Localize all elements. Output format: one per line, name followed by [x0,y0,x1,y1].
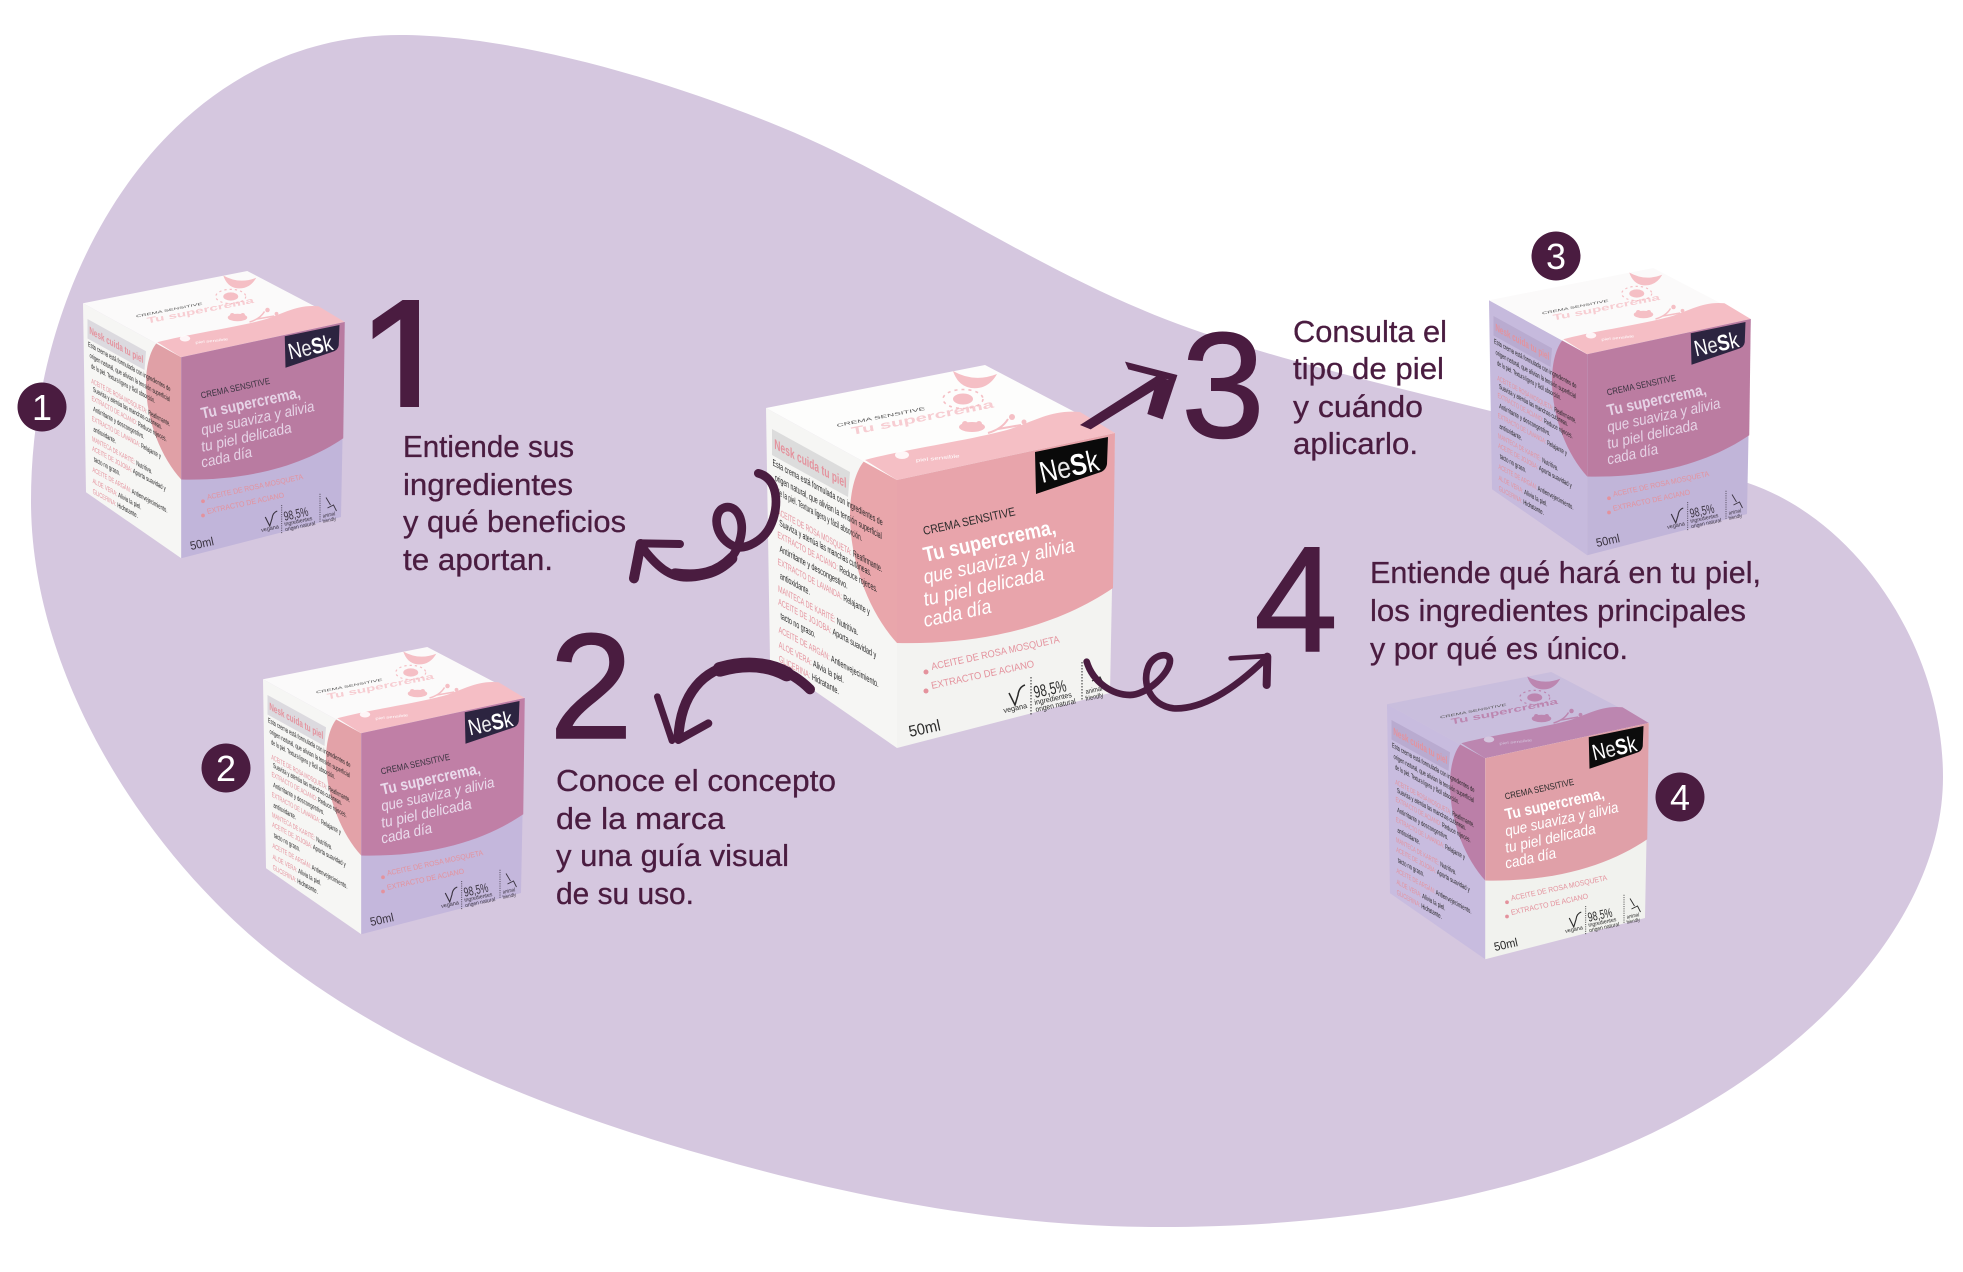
front face: Tu supercrema, [1504,786,1606,824]
left face: Nesk cuida tu piel [1495,322,1549,363]
left face: Esta crema está formulada con ingredientes de [1494,337,1577,390]
text block step 4: los ingredientes principales [1370,593,1746,628]
top face: piel sensible [195,337,229,345]
front face: ACEITE DE ROSA MOSQUETA [206,472,304,502]
central product box [766,365,1115,748]
left face: ALOE VERA: Alivia la piel. [273,852,321,888]
front face: Tu supercrema, [380,761,482,799]
left face [83,303,181,558]
front face: CREMA SENSITIVE [1606,373,1677,397]
top face [766,365,1115,480]
left face: MANTECA DE KARITÉ: Nutritiva. [272,810,332,852]
front face: friendly [1626,917,1641,926]
left face: ACEITE DE ROSA MOSQUETA: Reafirmante. [777,507,882,575]
front face: vegana [1667,521,1686,531]
text block step 2: Conoce el concepto [556,763,836,798]
arrow to step 1 [634,473,776,578]
front face [1485,723,1649,959]
front face: tu piel delicada [1504,821,1597,857]
left face: origen natural, que alivian la tensión superficial [90,351,170,404]
left face: antioxidante. [1499,422,1522,442]
front face: vegana [1003,701,1029,715]
front face: CREMA SENSITIVE [1504,777,1575,801]
left face: origen natural, que alivian la tensión superficial [1394,752,1474,805]
front face: NeSk [1692,327,1742,361]
front face: animal [502,887,516,896]
front face: EXTRACTO DE ACIANO [206,490,285,516]
front face: origen natural [1035,696,1077,714]
front face: 50ml [907,718,942,741]
big numeral 4: 4 [1254,515,1338,683]
left face: ACEITE DE ROSA MOSQUETA: Reafirmante. [91,377,170,428]
left face: Antirritante y descongestivo. [780,544,848,592]
left face: EXTRACTO DE ACIANO: Reduce rojeces. [272,770,347,819]
front face: cada día [921,596,993,632]
text block step 3: Consulta el [1293,314,1447,349]
front face: origen natural [285,521,316,533]
top face: Tu supercrema [146,295,255,325]
front face: 50ml [189,534,215,553]
front face: ingredientes [464,892,493,904]
left face: de la piel. Textura ligera y fácil absorción. [1395,763,1459,806]
left face: MANTECA DE KARITÉ: Nutritiva. [92,434,152,476]
top face: Tu supercrema [850,397,995,437]
left face: Suaviza y atenúa las manchas cutáneas. [779,518,871,579]
front face: 98,5% [1586,905,1614,925]
text block step 4: Entiende qué hará en tu piel, [1370,555,1761,590]
badge 4: 4 [1670,777,1690,818]
left face: ALOE VERA: Alivia la piel. [93,476,141,512]
text block step 3 [1293,314,1447,461]
front face: ingredientes [1690,513,1719,525]
front face: cada día [1504,845,1558,872]
left face: MANTECA DE KARITÉ: Nutritiva. [778,582,858,638]
front face [361,698,525,934]
left face [1489,300,1587,555]
left face: EXTRACTO DE LAVANDA: Relajante y [272,790,341,836]
big numeral 2: 2 [549,602,633,770]
front face [1587,319,1751,555]
left face: Antirritante y descongestivo. [93,404,144,441]
front face: ACEITE DE ROSA MOSQUETA [1510,873,1608,903]
left face: antioxidante. [1397,826,1420,846]
top face: CREMA SENSITIVE [1542,299,1609,316]
left face: ALOE VERA: Alivia la piel. [779,640,844,686]
left face: Antirritante y descongestivo. [1397,805,1448,842]
left face: de la piel. Textura ligera y fácil absorción. [1497,359,1561,402]
top face [1489,268,1751,354]
badge 4 [1656,772,1704,822]
left face: Antirritante y descongestivo. [1499,401,1550,438]
left face: Nesk cuida tu piel [269,701,323,742]
left face: EXTRACTO DE ACIANO: Reduce rojeces. [1498,391,1573,440]
front face [181,322,345,558]
left face: tacto no graso. [780,611,815,641]
front face: tu piel delicada [1606,417,1699,453]
left face: ACEITE DE ROSA MOSQUETA: Reafirmante. [1497,374,1576,425]
left face: ACEITE DE ARGÁN: Antienvejecimiento. [1396,866,1471,916]
front face: que suaviza y alivia [921,535,1077,589]
left face [263,679,361,934]
front face: CREMA SENSITIVE [200,376,271,400]
left face: ACEITE DE ARGÁN: Antienvejecimiento. [92,465,167,515]
left face: ACEITE DE ROSA MOSQUETA: Reafirmante. [271,753,350,804]
front face: ACEITE DE ROSA MOSQUETA [386,848,484,878]
front face: que suaviza y alivia [380,774,496,815]
front face: vegana [441,900,460,910]
left face: Esta crema está formulada con ingredientes de [1392,741,1475,794]
top face: Tu supercrema [1552,292,1661,322]
left face: ALOE VERA: Alivia la piel. [1397,877,1445,913]
front face: ingredientes [1034,690,1073,707]
front face: NeSk [466,706,516,740]
product box 3 [1489,268,1751,555]
badge 2: 2 [216,748,236,789]
left face: origen natural, que alivian la tensión superficial [270,727,350,780]
top face: piel sensible [1601,334,1635,342]
left face: GLICERINA: Hidratante. [1397,888,1442,921]
front face: origen natural [465,897,496,909]
left face: tacto no graso. [94,455,120,478]
front face: ACEITE DE ROSA MOSQUETA [1612,469,1710,499]
top face [263,647,525,733]
arrow to step 4 [1087,655,1268,708]
front face: animal [1626,912,1640,921]
arrow to step 2 [657,663,810,741]
left face: Nesk cuida tu piel [1393,726,1447,767]
front face: vegana [1565,925,1584,935]
front face: cada día [1606,441,1660,468]
left face: MANTECA DE KARITÉ: Nutritiva. [1498,431,1558,473]
front face: ingredientes [1588,917,1617,929]
left face: GLICERINA: Hidratante. [93,487,138,520]
front face: que suaviza y alivia [1504,799,1620,840]
left face: EXTRACTO DE LAVANDA: Relajante y [1498,411,1567,457]
front face: tu piel delicada [200,420,293,456]
left face: ACEITE DE JOJOBA: Aporta suavidad y [92,444,166,493]
top face [1387,672,1649,758]
left face: Nesk cuida tu piel [89,325,143,366]
left face: de la piel. Textura ligera y fácil absorción. [777,487,862,544]
front face: CREMA SENSITIVE [380,752,451,776]
front face: Tu supercrema, [1606,382,1708,420]
front face: tu piel delicada [921,563,1046,611]
left face: EXTRACTO DE ACIANO: Reduce rojeces. [1396,795,1471,844]
text block step 1: ingredientes [403,467,573,502]
badge 1 [18,382,66,432]
left face: ACEITE DE JOJOBA: Aporta suavidad y [1396,845,1470,894]
front face: ingredientes [284,516,313,528]
front face: ACEITE DE ROSA MOSQUETA [930,634,1061,673]
text block step 4: y por qué es único. [1370,631,1628,666]
left face: Suaviza y atenúa las manchas cutáneas. [1499,382,1568,428]
front face: 98,5% [282,504,310,524]
left face: ACEITE DE ARGÁN: Antienvejecimiento. [779,623,879,690]
top face: CREMA SENSITIVE [836,406,926,428]
front face: NeSk [286,330,336,364]
front face: origen natural [1691,518,1722,530]
left face: ACEITE DE JOJOBA: Aporta suavidad y [272,820,346,869]
front face: EXTRACTO DE ACIANO [386,866,465,892]
top face: piel sensible [1499,738,1533,746]
front face: 98,5% [1032,676,1068,702]
top face: CREMA SENSITIVE [136,302,203,319]
front face: friendly [1085,692,1104,703]
front face: que suaviza y alivia [1606,395,1722,436]
text block step 1: Entiende sus [403,429,574,464]
left face: Suaviza y atenúa las manchas cutáneas. [93,385,162,431]
front face: EXTRACTO DE ACIANO [1510,891,1589,917]
left face [766,408,897,748]
top face: Tu supercrema [1450,696,1559,726]
left face: EXTRACTO DE LAVANDA: Relajante y [92,414,161,460]
text block step 2: de su uso. [556,876,694,911]
left face: ALOE VERA: Alivia la piel. [1499,473,1547,509]
front face: friendly [1728,513,1743,522]
front face: 50ml [1595,531,1621,550]
left face: de la piel. Textura ligera y fácil absorción. [91,362,155,405]
left face: Esta crema está formulada con ingredientes de [268,716,351,769]
left face: ACEITE DE ARGÁN: Antienvejecimiento. [272,841,347,891]
left face: Suaviza y atenúa las manchas cutáneas. [1397,786,1466,832]
product box 2 [263,647,525,934]
front face: cada día [380,820,434,847]
left face: Esta crema está formulada con ingredientes de [773,458,883,529]
front face: 98,5% [462,880,490,900]
front face: friendly [322,516,337,525]
big numeral 1: 1 [357,263,456,462]
front face: NeSk [1036,444,1103,490]
front face: origen natural [1589,922,1620,934]
left face: GLICERINA: Hidratante. [779,654,839,697]
left face: EXTRACTO DE LAVANDA: Relajante y [1396,815,1465,861]
left face: MANTECA DE KARITÉ: Nutritiva. [1396,835,1456,877]
front face: NeSk [1590,731,1640,765]
left face: antioxidante. [93,425,116,445]
left face: Suaviza y atenúa las manchas cutáneas. [273,761,342,807]
text block step 2: de la marca [556,801,726,836]
left face: tacto no graso. [1398,856,1424,879]
product box 1 [83,271,345,558]
left face: EXTRACTO DE ACIANO: Reduce rojeces. [92,394,167,443]
left face: GLICERINA: Hidratante. [1499,484,1544,517]
front face: animal [322,511,336,520]
top face: piel sensible [916,454,960,463]
left face: antioxidante. [780,571,810,598]
text block step 1: te aportan. [403,542,553,577]
front face: 50ml [1493,935,1519,954]
text block step 3: y cuándo [1293,389,1423,424]
front face: vegana [261,524,280,534]
left face: tacto no graso. [274,831,300,854]
text block step 2 [556,763,836,911]
front face [897,433,1115,748]
left face: ACEITE DE JOJOBA: Aporta suavidad y [778,597,877,661]
front face: tu piel delicada [380,796,473,832]
badge 1: 1 [32,387,52,428]
top face: CREMA SENSITIVE [316,678,383,695]
left face: GLICERINA: Hidratante. [273,863,318,896]
left face: ACEITE DE JOJOBA: Aporta suavidad y [1498,441,1572,490]
front face: Tu supercrema, [200,385,302,423]
badge 2 [202,744,250,792]
front face: cada día [200,444,254,471]
left face: tacto no graso. [1500,452,1526,475]
front face: animal [1085,685,1103,696]
top face: piel sensible [375,713,409,721]
left face: de la piel. Textura ligera y fácil absorción. [271,738,335,781]
text block step 1 [403,429,626,577]
product box 4 [1387,672,1649,959]
text block step 2: y una guía visual [556,838,789,873]
text block step 4 [1370,555,1761,666]
left face: EXTRACTO DE LAVANDA: Relajante y [778,557,870,618]
left face: ACEITE DE ARGÁN: Antienvejecimiento. [1498,462,1573,512]
left face: Antirritante y descongestivo. [273,780,324,817]
front face: Tu supercrema, [921,516,1058,567]
front face: friendly [502,892,517,901]
left face [1387,704,1485,959]
front face: que suaviza y alivia [200,398,316,439]
text block step 3: tipo de piel [1293,351,1444,386]
front face: EXTRACTO DE ACIANO [930,659,1035,692]
badge 3: 3 [1546,236,1566,277]
text block step 3: aplicarlo. [1293,426,1418,461]
left face: ACEITE DE ROSA MOSQUETA: Reafirmante. [1395,778,1474,829]
top face: Tu supercrema [326,671,435,701]
left face: antioxidante. [273,801,296,821]
front face: EXTRACTO DE ACIANO [1612,487,1691,513]
badge 3 [1532,232,1580,280]
left face: Nesk cuida tu piel [774,436,846,492]
top face: CREMA SENSITIVE [1440,703,1507,720]
left face: origen natural, que alivian la tensión superficial [1496,348,1576,401]
front face: CREMA SENSITIVE [922,504,1017,538]
arrow to step 3 [1080,362,1177,429]
front face: 50ml [369,910,395,929]
top face [83,271,345,357]
front face: 98,5% [1688,501,1716,521]
text block step 1: y qué beneficios [403,504,626,539]
front face: animal [1728,508,1742,517]
left face: origen natural, que alivian la tensión superficial [775,473,882,542]
left face: Esta crema está formulada con ingredientes de [88,340,171,393]
big numeral 3: 3 [1181,301,1265,469]
left face: EXTRACTO DE ACIANO: Reduce rojeces. [777,530,878,595]
